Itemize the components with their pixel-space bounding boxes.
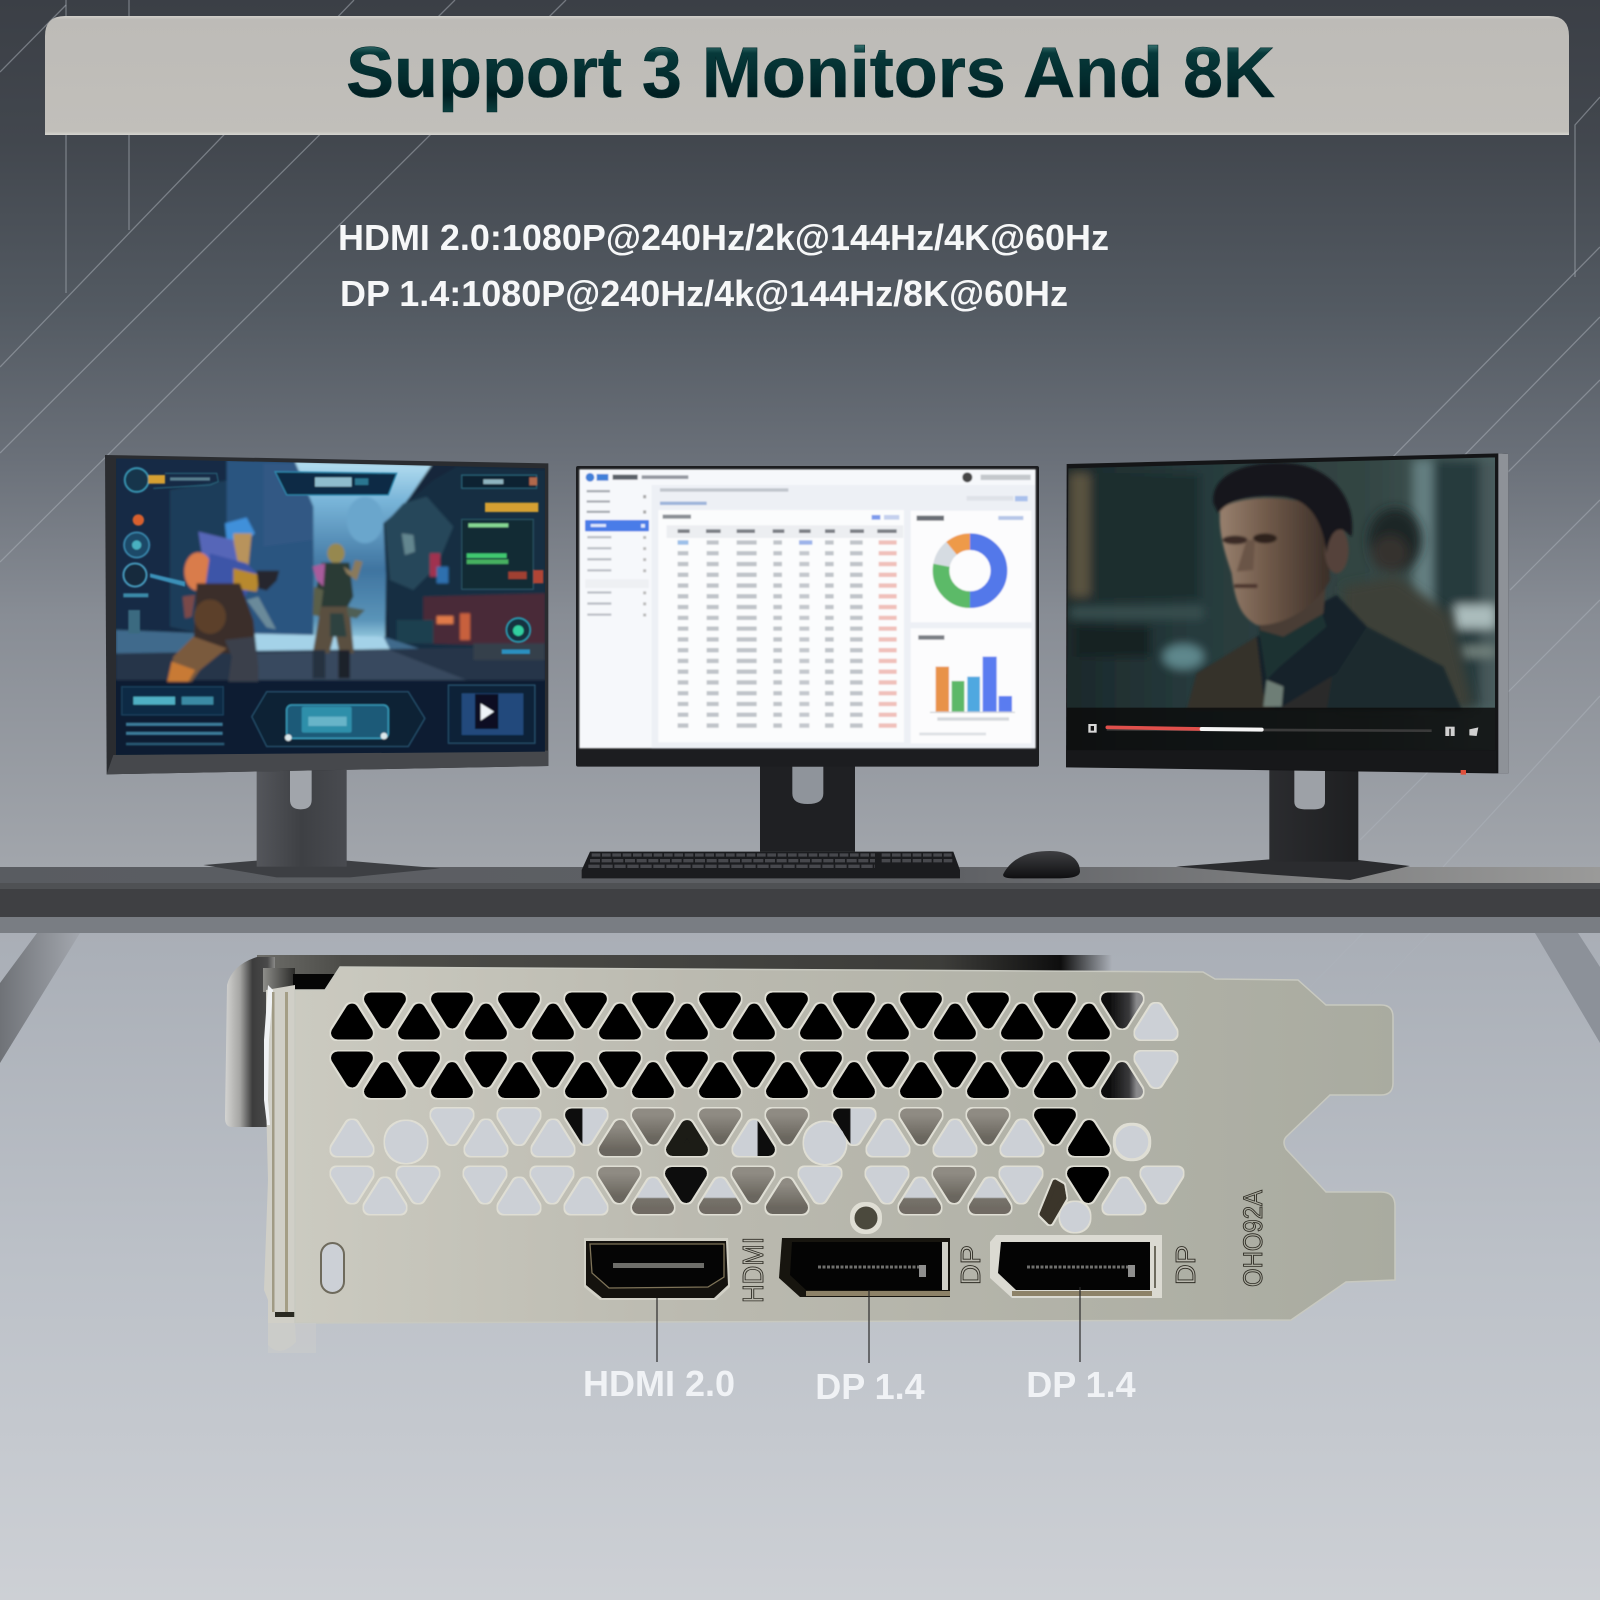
monitor 2 dashboard screen bbox=[579, 469, 1036, 748]
donut chart bbox=[941, 542, 999, 600]
monitor 1: game bbox=[105, 455, 548, 877]
dashboard data table bbox=[658, 510, 904, 742]
dashboard donut chart panel bbox=[911, 511, 1031, 622]
HDMI port bbox=[584, 1238, 730, 1300]
DisplayPort connector 1 bbox=[779, 1238, 950, 1297]
oval mounting slot bbox=[321, 1243, 344, 1293]
cooler left edge bbox=[225, 957, 275, 1127]
monitor 3 stand bbox=[1176, 768, 1410, 880]
right character bbox=[313, 543, 365, 678]
vent holes: top two rows bbox=[338, 999, 1170, 1092]
desk left leg bbox=[0, 933, 80, 1063]
bracket left folded strip bbox=[264, 985, 296, 1351]
DP spec line: DP 1.4:1080P@240Hz/4k@144Hz/8K@60Hz bbox=[340, 273, 1068, 314]
keyboard bbox=[582, 852, 960, 878]
background: lower floor gradient bbox=[0, 930, 1600, 1600]
leader line: DP 2 bbox=[1079, 1287, 1081, 1362]
dashboard sidebar bbox=[585, 490, 649, 617]
monitor 3 bezel bbox=[1066, 751, 1496, 773]
dashboard top bar bbox=[586, 472, 1031, 505]
title: Support 3 Monitors And 8K bbox=[346, 34, 1275, 113]
monitor 3: video bbox=[1050, 440, 1517, 880]
port callout: DP 1.4 right: DP 1.4 bbox=[1026, 1364, 1136, 1405]
resolution specifications text bbox=[338, 217, 1109, 314]
port callout: DP 1.4 left: DP 1.4 bbox=[815, 1366, 925, 1407]
monitor 2: dashboard bbox=[576, 466, 1039, 852]
cooler top band bbox=[257, 955, 1112, 975]
monitor 2 frame bbox=[576, 466, 1039, 767]
HDMI spec line: HDMI 2.0:1080P@240Hz/2k@144Hz/4K@60Hz bbox=[338, 217, 1109, 258]
engraved part number: OHO92A bbox=[1238, 1190, 1268, 1287]
monitor 2 stand bbox=[760, 765, 855, 852]
mouse bbox=[1003, 851, 1080, 878]
port callout: HDMI 2.0: HDMI 2.0 bbox=[583, 1363, 735, 1404]
monitor 3 frame bbox=[1066, 453, 1508, 773]
game HUD overlay bbox=[122, 468, 543, 747]
main character figure bbox=[1187, 463, 1462, 710]
monitor 1 game screen bbox=[113, 457, 547, 757]
DisplayPort connector 2 bbox=[990, 1235, 1162, 1298]
dashboard bar chart panel bbox=[911, 628, 1031, 743]
monitor 3 power LED bbox=[1461, 770, 1466, 775]
bracket bottom foot fade bbox=[268, 1323, 316, 1353]
PCIe bracket plate bbox=[264, 967, 1395, 1353]
leader line: HDMI bbox=[656, 1298, 658, 1362]
engraved port label DP 1: DP bbox=[955, 1245, 986, 1285]
engraved port label HDMI: HDMI bbox=[738, 1237, 770, 1303]
engraved port label DP 2: DP bbox=[1170, 1245, 1201, 1285]
video player control bar bbox=[1063, 708, 1500, 753]
header banner bbox=[45, 16, 1569, 135]
background: upper wall gradient bbox=[0, 0, 1600, 880]
desk right leg bbox=[1535, 933, 1600, 1043]
cooler inner shade bbox=[263, 968, 295, 992]
graphics card cooler behind bracket bbox=[225, 955, 1112, 1127]
monitor 1 stand bbox=[203, 770, 440, 877]
monitor 3 silver edge bbox=[1498, 453, 1508, 773]
leader line: DP 1 bbox=[868, 1290, 870, 1363]
vent round holes bbox=[385, 1121, 427, 1163]
left character bbox=[167, 517, 279, 682]
bracket plate body bbox=[295, 967, 1395, 1323]
desk bbox=[0, 867, 1600, 1063]
monitor 3 movie screen bbox=[1067, 458, 1495, 736]
monitor 1 bezel bbox=[107, 751, 548, 774]
vent holes: lower two rows bbox=[338, 1115, 1176, 1232]
cooler dark opening bbox=[293, 974, 345, 992]
monitor 1 frame bbox=[105, 455, 548, 774]
